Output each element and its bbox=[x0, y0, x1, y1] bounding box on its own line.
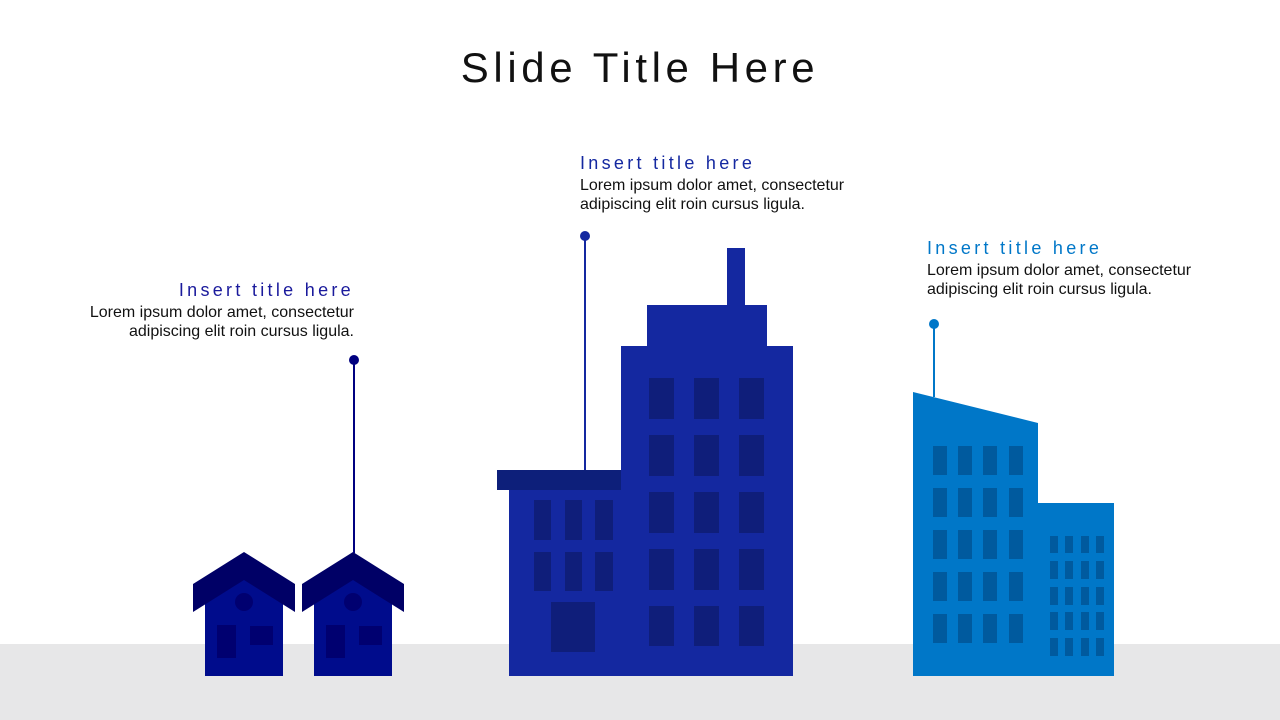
houses bbox=[193, 552, 404, 676]
text block: middle: Insert title here bbox=[580, 153, 755, 173]
text block: right: Lorem ipsum dolor amet, consectetur bbox=[927, 262, 1191, 279]
pin: middle bbox=[580, 231, 590, 470]
right building bbox=[913, 392, 1114, 676]
text block: right: Insert title here bbox=[927, 238, 1102, 258]
text block: left: adipiscing elit roin cursus ligula. bbox=[129, 323, 354, 340]
text block: middle bbox=[580, 153, 844, 213]
text block: right bbox=[927, 238, 1191, 298]
text block: middle: Lorem ipsum dolor amet, consectetur bbox=[580, 177, 844, 194]
text block: right: adipiscing elit roin cursus ligula. bbox=[927, 281, 1152, 298]
text block: left: Lorem ipsum dolor amet, consectetur bbox=[90, 304, 354, 321]
text block: middle: adipiscing elit roin cursus ligula. bbox=[580, 196, 805, 213]
text block: left bbox=[90, 280, 354, 340]
title: Slide Title Here bbox=[461, 44, 819, 91]
middle building bbox=[497, 248, 793, 676]
text block: left: Insert title here bbox=[179, 280, 354, 300]
ground bbox=[0, 644, 1280, 720]
pin: right bbox=[929, 319, 939, 397]
pin: left bbox=[349, 355, 359, 553]
